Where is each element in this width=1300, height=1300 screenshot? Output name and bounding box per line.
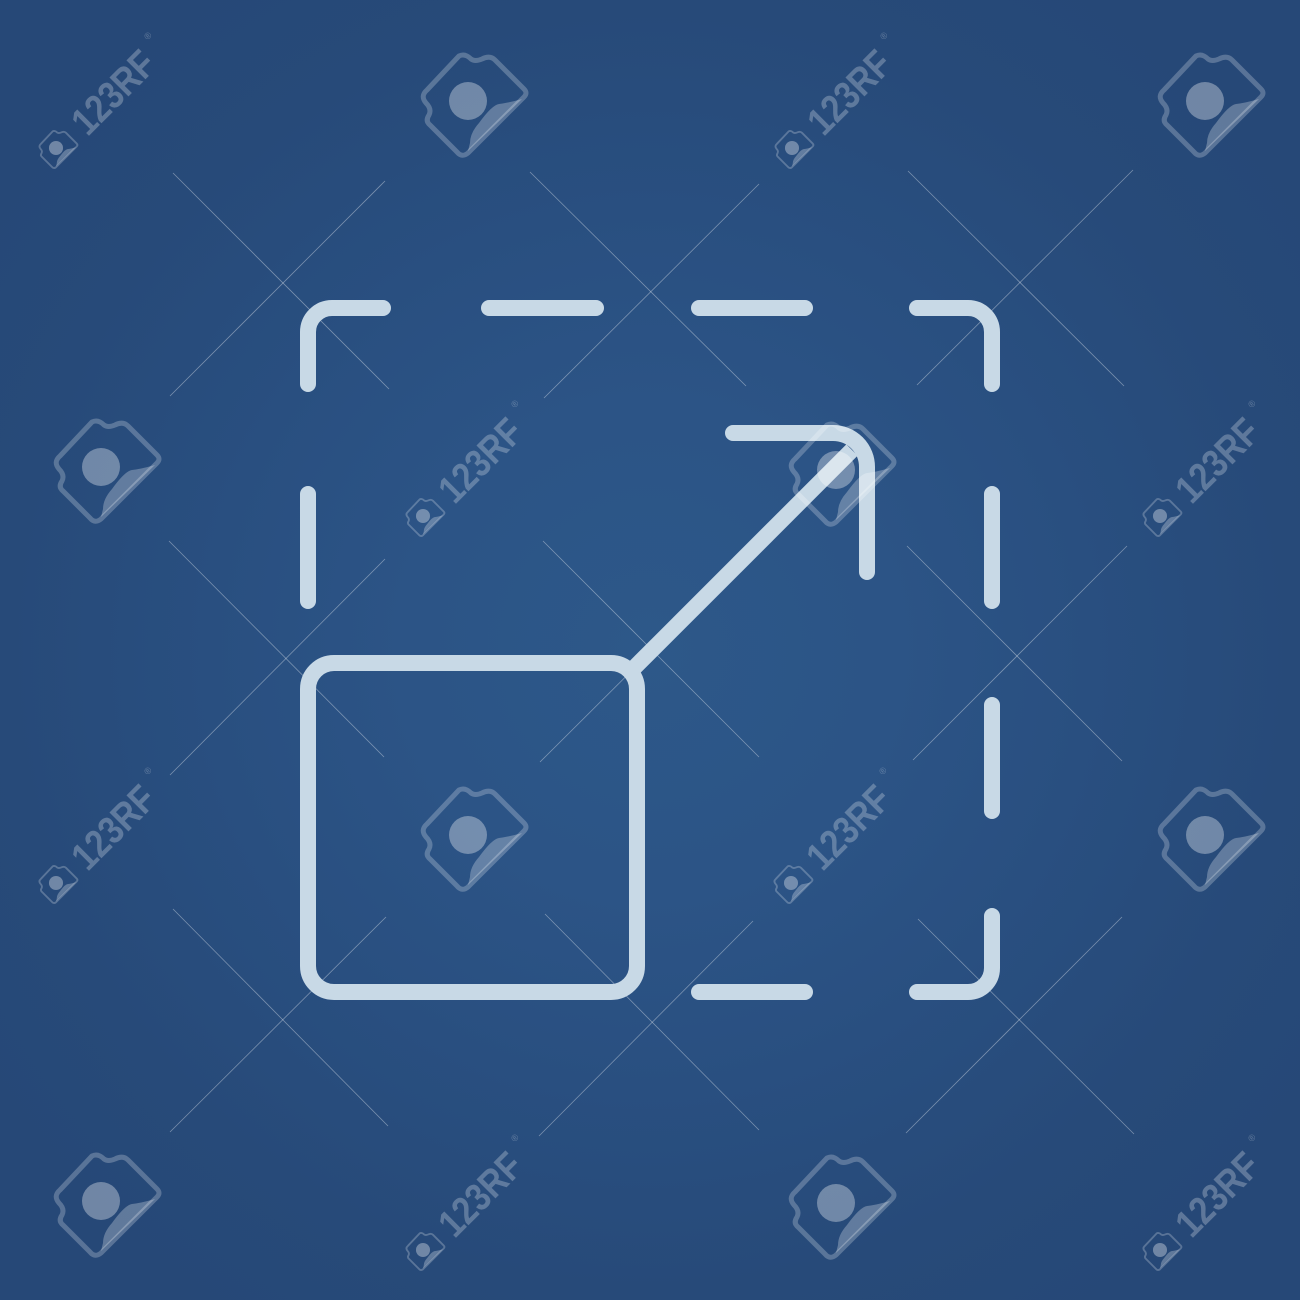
watermark row 1 right: [775, 30, 901, 168]
watermark row 4 right: [1143, 1132, 1269, 1270]
watermark row 1 left: [39, 30, 165, 168]
watermark row 2 left: [406, 398, 532, 536]
watermark row 3 left: 123RF: [64, 778, 165, 879]
watermark row 2 right: ®: [1246, 398, 1258, 410]
watermark row 4 left: [406, 1132, 532, 1270]
watermark row 4 left: ®: [509, 1132, 521, 1144]
dashed target frame: [308, 308, 992, 992]
watermark row 2 right: [1143, 398, 1269, 536]
arrow head: [733, 433, 867, 572]
watermark row 2 left: 123RF: [431, 411, 532, 512]
watermark row 3 right: 123RF: [799, 778, 900, 879]
small solid square: [308, 663, 637, 992]
icon: resize square with dashed frame and arrow: [308, 308, 992, 992]
watermark row 3 right: [774, 765, 900, 903]
watermark row 3 right: ®: [877, 765, 889, 777]
watermark row 1 left: ®: [142, 30, 154, 42]
watermark row 3 left: ®: [142, 765, 154, 777]
watermark row 4 left: 123RF: [431, 1145, 532, 1246]
arrow shaft: [632, 450, 852, 670]
watermark row 1 right: ®: [878, 30, 890, 42]
watermark row 3 left: [39, 765, 165, 903]
watermark row 4 right: 123RF: [1168, 1145, 1269, 1246]
watermark row 1 right: 123RF: [800, 43, 901, 144]
watermark row 1 left: 123RF: [64, 43, 165, 144]
watermark row 2 left: ®: [509, 398, 521, 410]
watermark row 2 right: 123RF: [1168, 411, 1269, 512]
thin crossing guide lines: [169, 170, 1134, 1136]
watermark row 4 right: ®: [1246, 1132, 1258, 1144]
